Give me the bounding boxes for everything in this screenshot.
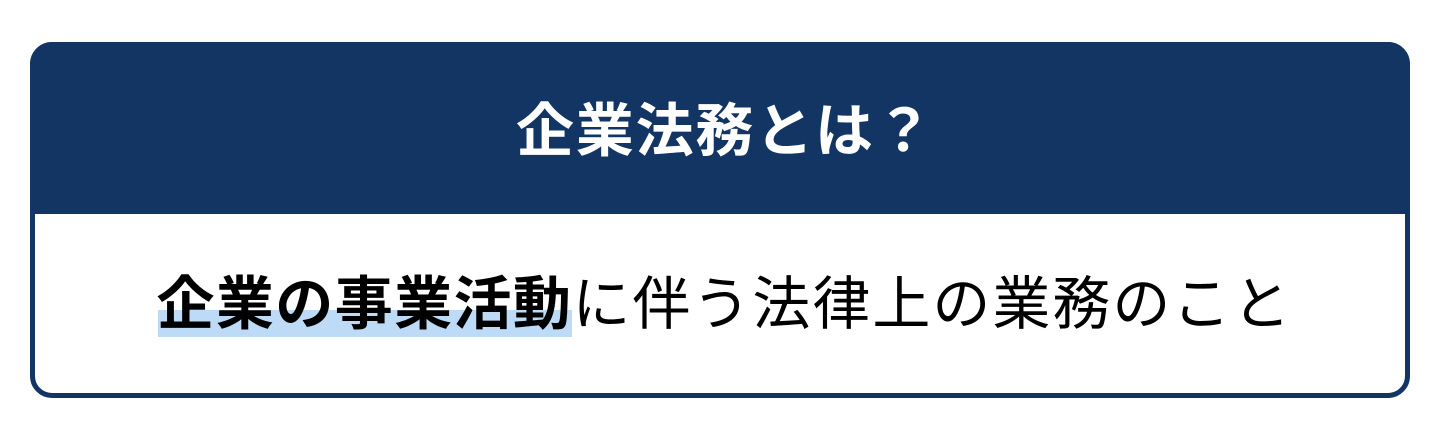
panel: definition card xyxy=(30,42,1410,398)
highlight marker xyxy=(158,310,572,337)
title: 企業法務とは？ xyxy=(516,99,935,164)
heading band xyxy=(30,42,1410,214)
definition text: 企業の事業活動に伴う法律上の業務のこと xyxy=(156,272,1292,337)
